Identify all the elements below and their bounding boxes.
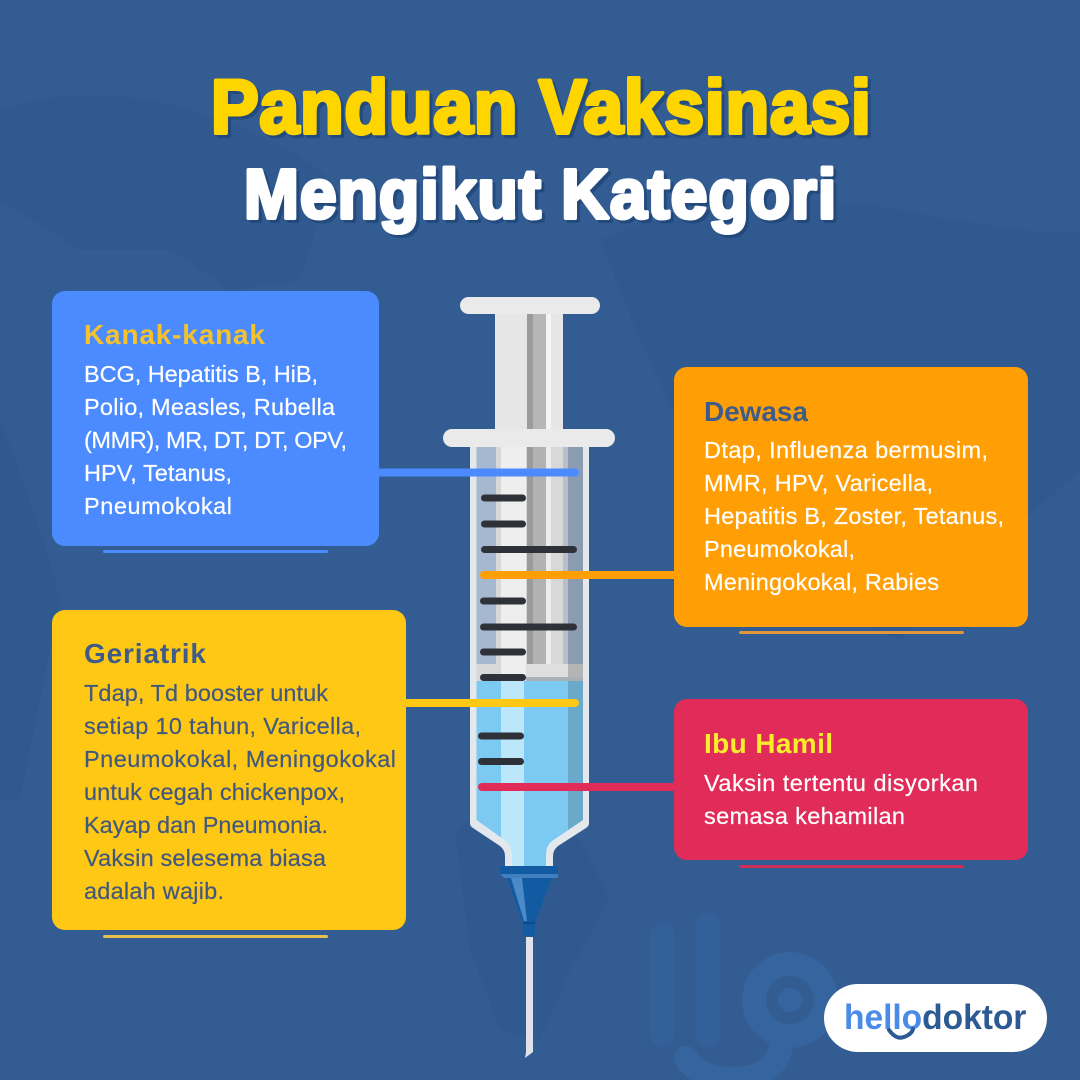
title line 1: Panduan Vaksinasi xyxy=(211,64,871,149)
text: Kanak-kanak vaccines: Polio, Measles, Rubella xyxy=(84,394,336,420)
syringe illustration xyxy=(443,297,615,1058)
heading: Kanak-kanak: Kanak-kanak xyxy=(84,319,265,350)
title xyxy=(211,64,874,236)
connector: Ibu Hamil xyxy=(478,783,678,791)
plunger rod xyxy=(495,312,563,432)
heading: Geriatrik: Geriatrik xyxy=(84,638,206,669)
background stethoscope watermark xyxy=(662,925,826,1079)
title line 2: Mengikut Kategori xyxy=(247,159,839,236)
text: Dewasa vaccines: Dtap, Influenza bermusim, xyxy=(704,437,988,463)
plunger lower flange xyxy=(443,429,615,447)
text: Dewasa vaccines: Hepatitis B, Zoster, Tetanus, xyxy=(704,503,1004,529)
connector: Dewasa xyxy=(480,571,678,579)
panel: Kanak-kanak xyxy=(52,291,379,553)
plunger top flange xyxy=(460,297,600,314)
title line 1: Panduan Vaksinasi xyxy=(214,67,874,152)
barrel xyxy=(470,447,589,868)
text: Dewasa vaccines: Meningokokal, Rabies xyxy=(704,569,939,595)
text: Kanak-kanak vaccines: BCG, Hepatitis B, HiB, xyxy=(84,361,318,387)
graduation ticks xyxy=(478,494,577,765)
connector: Kanak-kanak xyxy=(375,468,579,476)
text: Kanak-kanak vaccines xyxy=(84,361,347,519)
text: Geriatrik vaccines xyxy=(84,680,396,904)
text: Dewasa vaccines: Pneumokokal, xyxy=(704,536,855,562)
text: Dewasa vaccines: MMR, HPV, Varicella, xyxy=(704,470,933,496)
logo: hellodoktor xyxy=(824,984,1047,1052)
panel: Dewasa xyxy=(674,367,1028,634)
text: Geriatrik vaccines: Pneumokokal, Meningokokal xyxy=(84,746,396,772)
heading: Dewasa: Dewasa xyxy=(704,396,808,427)
panel: Geriatrik xyxy=(52,610,406,938)
text: Ibu Hamil vaccines xyxy=(704,770,978,829)
text: Kanak-kanak vaccines: HPV, Tetanus, xyxy=(84,460,232,486)
text: Geriatrik vaccines: setiap 10 tahun, Varicella, xyxy=(84,713,361,739)
text: Geriatrik vaccines: untuk cegah chickenpox, xyxy=(84,779,345,805)
text: Ibu Hamil vaccines: Vaksin tertentu disyorkan xyxy=(704,770,978,796)
title line 2: Mengikut Kategori xyxy=(244,156,836,233)
text: Geriatrik vaccines: adalah wajib. xyxy=(84,878,224,904)
text: Geriatrik vaccines: Kayap dan Pneumonia. xyxy=(84,812,328,838)
connector: Geriatrik xyxy=(402,699,579,707)
needle xyxy=(525,937,533,1058)
heading: Ibu Hamil: Ibu Hamil xyxy=(704,728,833,759)
text: Geriatrik vaccines: Vaksin selesema biasa xyxy=(84,845,327,871)
panel: Ibu Hamil xyxy=(674,699,1028,868)
text: Kanak-kanak vaccines: Pneumokokal xyxy=(84,493,232,519)
text: Ibu Hamil vaccines: semasa kehamilan xyxy=(704,803,905,829)
text: Geriatrik vaccines: Tdap, Td booster untuk xyxy=(84,680,328,706)
text: Kanak-kanak vaccines: (MMR), MR, DT, DT, OPV, xyxy=(84,427,347,453)
text: Dewasa vaccines xyxy=(704,437,1004,595)
logo: hellodoktor: hellodoktor xyxy=(844,998,1026,1037)
needle hub xyxy=(500,866,558,936)
